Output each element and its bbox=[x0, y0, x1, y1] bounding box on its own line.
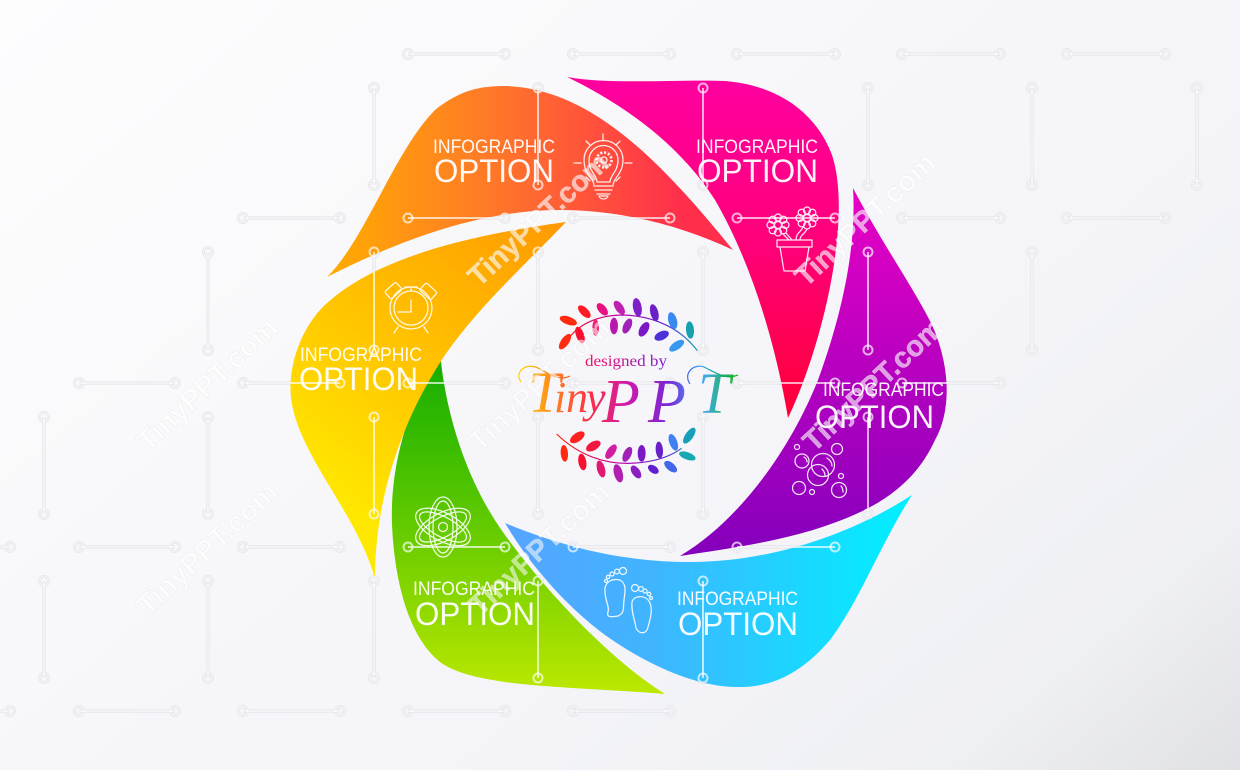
label: orange option bbox=[433, 137, 555, 189]
icon: atom bbox=[410, 497, 476, 557]
label: yellow option bbox=[299, 345, 422, 397]
logo: TinyPPT wordmark: T bbox=[528, 360, 564, 425]
label: orange option: OPTION bbox=[434, 153, 554, 189]
watermarks: TinyPPT.com bbox=[131, 476, 284, 622]
label: purple option bbox=[815, 380, 944, 435]
label: orange option: INFOGRAPHIC bbox=[433, 137, 555, 158]
label: cyan option: INFOGRAPHIC bbox=[677, 589, 798, 610]
watermarks: TinyPPT.com bbox=[131, 312, 284, 458]
label: green option: INFOGRAPHIC bbox=[413, 579, 535, 600]
blade: green bbox=[392, 352, 665, 694]
blade: cyan bbox=[505, 495, 912, 687]
watermarks: TinyPPT.com bbox=[789, 147, 942, 293]
watermarks: TinyPPT.com bbox=[462, 147, 615, 293]
label: magenta option: INFOGRAPHIC bbox=[696, 137, 818, 158]
blade: purple bbox=[680, 188, 947, 556]
logo: TinyPPT wordmark: T bbox=[698, 361, 734, 426]
logo: TinyPPT wordmark: iny bbox=[554, 373, 606, 422]
label: cyan option bbox=[677, 589, 798, 642]
logo: TinyPPT wordmark: PP bbox=[601, 368, 686, 436]
watermarks: TinyPPT.com bbox=[463, 312, 616, 458]
icon: lightbulb with gear bbox=[574, 134, 632, 199]
icon: flower pot bbox=[767, 207, 818, 271]
label: magenta option: OPTION bbox=[697, 153, 818, 189]
label: yellow option: OPTION bbox=[299, 361, 418, 397]
blade: yellow bbox=[290, 222, 566, 578]
logo: bottom laurel bbox=[557, 426, 698, 483]
watermarks: TinyPPT.com bbox=[797, 312, 950, 458]
label: yellow option: INFOGRAPHIC bbox=[300, 345, 422, 366]
blade: magenta bbox=[567, 77, 839, 418]
logo: designed by: designed by bbox=[585, 353, 667, 370]
watermarks bbox=[131, 147, 950, 622]
watermarks: TinyPPT.com bbox=[463, 476, 616, 622]
logo: T flourishes bbox=[519, 366, 738, 384]
label: green option: OPTION bbox=[415, 596, 535, 632]
label: purple option: OPTION bbox=[815, 399, 934, 435]
label: cyan option: OPTION bbox=[678, 606, 798, 642]
logo: top laurel bbox=[557, 297, 697, 354]
label: magenta option bbox=[696, 137, 818, 189]
label: purple option: INFOGRAPHIC bbox=[823, 380, 944, 401]
label: green option bbox=[413, 579, 535, 632]
blade: orange-red bbox=[327, 86, 733, 277]
central logo bbox=[519, 297, 738, 483]
icon: soap bubbles bbox=[792, 444, 846, 498]
icon: footprints bbox=[604, 568, 652, 633]
icon: alarm clock bbox=[384, 282, 437, 333]
